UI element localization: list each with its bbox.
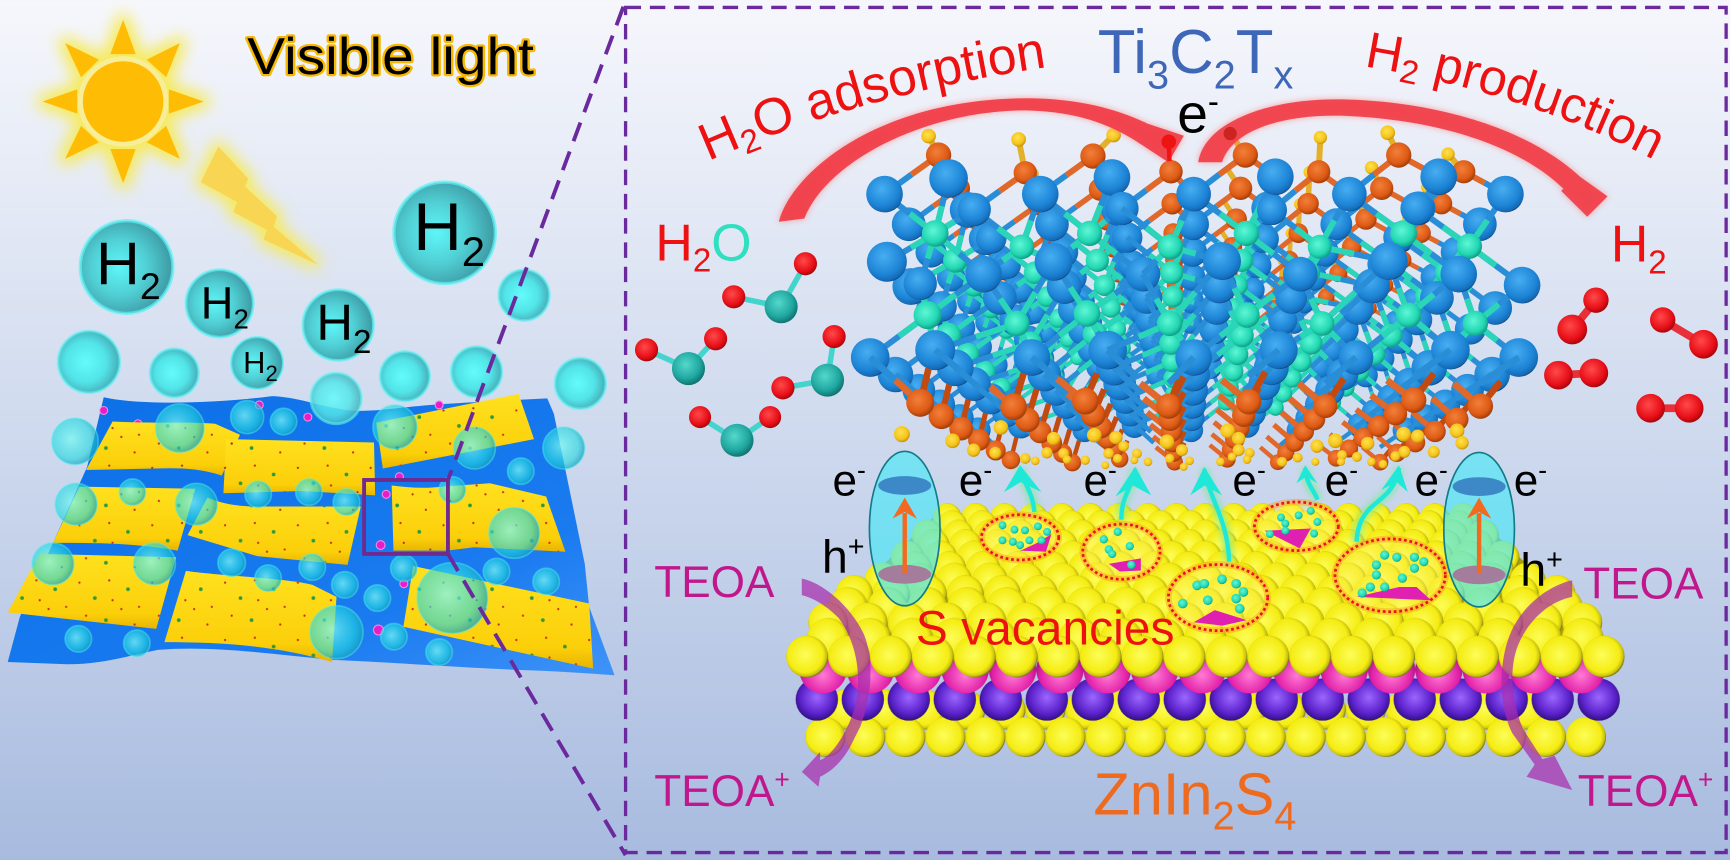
electron labels: - xyxy=(1538,455,1547,485)
TEOA labels: + xyxy=(1698,764,1713,794)
sulfur vacancies xyxy=(982,502,1445,631)
charge separation capsule: left xyxy=(869,451,940,606)
indium layer xyxy=(799,646,1605,693)
inset selection box xyxy=(364,480,448,554)
TEOA labels: + xyxy=(774,764,790,794)
label: H2O: 2 xyxy=(693,242,711,279)
electron labels: - xyxy=(1349,455,1358,485)
hydrogen termination atoms xyxy=(894,420,1469,471)
label: Ti3C2Tx: Ti xyxy=(1098,18,1147,87)
arrow: TEOA oxidation right xyxy=(1502,580,1572,790)
vacancy 3 xyxy=(1168,564,1268,631)
vacancy 4 xyxy=(1254,502,1338,551)
heading path: H2 production: 2 xyxy=(1400,60,1418,85)
electron labels: e xyxy=(1325,456,1349,505)
hydrogen bubble: large: H xyxy=(413,190,462,265)
label: electron top: - xyxy=(1208,84,1219,121)
TEOA labels: TEOA xyxy=(654,767,774,816)
electron labels: - xyxy=(857,455,866,485)
electron labels: e xyxy=(1414,456,1439,505)
free bubbles group xyxy=(58,270,606,424)
vacancy 2 xyxy=(1083,524,1160,579)
hydrogen bubble: small: 2 xyxy=(265,361,278,386)
hydrogen bubble: small xyxy=(231,337,283,389)
label: ZnIn2S4: 2 xyxy=(1213,795,1235,839)
electron transfer arrows xyxy=(1004,465,1408,562)
electron labels: - xyxy=(1108,455,1117,485)
lower sulfur rows xyxy=(805,690,1606,757)
heading path: H2 production: production xyxy=(1432,54,1661,158)
hydrogen bubble: right xyxy=(303,290,373,361)
hydrogen bubble: left: 2 xyxy=(140,265,161,307)
label: H2O: O xyxy=(711,213,752,271)
hole labels xyxy=(822,531,1563,595)
label: H2: 2 xyxy=(1648,245,1667,282)
magenta particles xyxy=(100,401,548,635)
TEOA labels: TEOA xyxy=(654,558,775,607)
hydrogen bubble: large xyxy=(394,182,495,284)
panel: detailed mechanism frame xyxy=(626,7,1726,853)
depth layers of lattice xyxy=(878,161,1512,471)
top sulfur surface xyxy=(786,503,1625,677)
icon: sun xyxy=(43,20,204,183)
label: S vacancies: S vacancies xyxy=(916,602,1174,655)
hole labels: h xyxy=(822,531,848,583)
hole labels: h xyxy=(1520,543,1546,595)
hydrogen bubble: middle xyxy=(186,270,253,337)
translucent gas bubbles on surface xyxy=(32,401,585,665)
hydrogen bubble: left: H xyxy=(96,230,140,298)
blue substrate xyxy=(8,396,615,675)
heading path: H2 production: H xyxy=(1368,32,1402,72)
heading path: H2O adsorption: 2 xyxy=(741,129,762,154)
hydrogen bubble: right: H xyxy=(316,294,353,351)
label: electron top: e xyxy=(1177,82,1208,144)
charge separation capsule: right xyxy=(1444,452,1514,607)
title: visible light: Visible light xyxy=(247,27,535,85)
hole labels: + xyxy=(1546,544,1563,576)
hydrogen bubble: right: 2 xyxy=(353,324,371,361)
arrow: TEOA oxidation left xyxy=(802,579,870,787)
water molecules xyxy=(635,252,846,457)
hydrogen molecules xyxy=(1544,287,1718,423)
electron labels: e xyxy=(959,456,983,505)
label: Ti3C2Tx: 3 xyxy=(1147,53,1169,97)
label: Ti3C2Tx: T xyxy=(1236,18,1274,87)
electron labels: e xyxy=(832,456,857,505)
label: H2O: H xyxy=(655,213,693,271)
TEOA labels: TEOA xyxy=(1583,560,1704,609)
TEOA labels: TEOA xyxy=(1578,767,1698,816)
heading path: H2O adsorption: H xyxy=(698,115,739,160)
label: Ti3C2Tx: x xyxy=(1274,53,1294,97)
heading path: H2O adsorption: O adsorption xyxy=(754,40,1044,135)
label: Ti3C2Tx: 2 xyxy=(1214,53,1236,97)
front lattice layer xyxy=(851,125,1540,420)
electron labels: e xyxy=(1232,456,1257,505)
yellow nanosheets xyxy=(8,394,593,669)
electron labels: - xyxy=(1439,455,1448,485)
hydrogen bubble: middle: 2 xyxy=(233,303,249,334)
icon: lightning bolt xyxy=(201,147,318,265)
electron labels xyxy=(832,455,1547,505)
electron labels: - xyxy=(1257,455,1266,485)
label: ZnIn2S4: 4 xyxy=(1274,795,1296,839)
electron labels: e xyxy=(1514,456,1538,505)
TEOA labels xyxy=(654,558,1713,816)
label: Ti3C2Tx: C xyxy=(1169,18,1214,87)
electron labels: e xyxy=(1083,456,1108,505)
arrow: hydrogen production xyxy=(1198,99,1608,217)
label: ZnIn2S4: ZnIn xyxy=(1093,760,1213,827)
structure: Ti3C2Tx lattice xyxy=(851,125,1540,471)
arrow: water adsorption xyxy=(779,98,1184,222)
hydrogen bubble: small: H xyxy=(243,345,265,380)
hydrogen bubble: middle: H xyxy=(201,277,233,328)
zinc layer xyxy=(794,677,1622,723)
label: ZnIn2S4: S xyxy=(1235,760,1274,827)
zoom connector lines xyxy=(448,7,626,855)
label: H2: H xyxy=(1611,215,1648,273)
structure: ZnIn2S4 slab xyxy=(786,503,1625,757)
hydrogen bubble: large: 2 xyxy=(462,228,485,275)
hydrogen bubble: left xyxy=(80,221,173,313)
vacancy 5 xyxy=(1335,539,1445,612)
vacancy 1 xyxy=(982,515,1059,560)
sheet dots xyxy=(8,394,593,669)
panel: catalyst sheet overview xyxy=(8,394,615,675)
hole labels: + xyxy=(848,531,864,563)
electron labels: - xyxy=(983,455,992,485)
